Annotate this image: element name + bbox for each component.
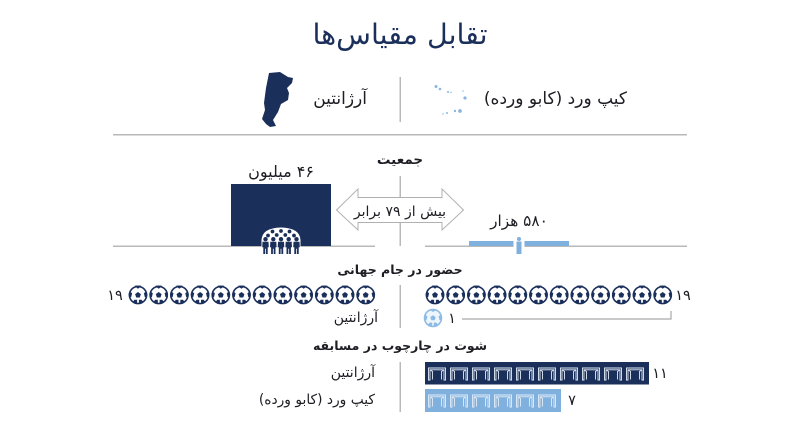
- icon: Cape Verde map: [434, 85, 467, 115]
- arrow: more than 79 times: [336, 189, 464, 230]
- panel: population: [113, 152, 687, 255]
- center divider: [400, 77, 401, 122]
- icon: person: [514, 236, 524, 254]
- heading: world cup appearances: حضور در جام جهانی: [337, 262, 463, 278]
- label: Cape Verde: کیپ ورد (کابو ورده): [259, 392, 375, 408]
- value: Cape Verde 19: ۱۹: [675, 288, 691, 304]
- icon row: Argentina balls: [129, 286, 375, 304]
- label: Argentina: آرژانتین: [313, 87, 368, 109]
- icon: Argentina map: [262, 72, 293, 127]
- icon: crowd: [262, 228, 300, 255]
- heading: population: جمعیت: [377, 152, 423, 168]
- bar: Argentina population: [231, 184, 331, 246]
- vertical axis: [400, 362, 401, 412]
- arrow: more than 79 times: بیش از ۷۹ برابر: [353, 204, 446, 220]
- value: Argentina 11: ۱۱: [652, 366, 668, 382]
- icon: light ball: [424, 309, 442, 327]
- heading: shots on target: شوت در چارچوب در مسابقه: [313, 338, 487, 353]
- value: Argentina 19: ۱۹: [107, 288, 123, 304]
- title: تقابل مقیاس‌ها: [312, 18, 488, 51]
- vertical axis: [400, 285, 401, 328]
- vertical axis: [400, 176, 401, 246]
- icon row: Cape Verde balls: [426, 286, 672, 304]
- bar: Cape Verde population: [469, 241, 569, 246]
- label: Argentina: آرژانتین: [331, 364, 376, 381]
- baseline right: [425, 246, 687, 247]
- value: Cape Verde 7: ۷: [568, 393, 576, 409]
- baseline left: [113, 246, 375, 247]
- panel: country header: [262, 72, 628, 127]
- value: 580 thousand: ۵۸۰ هزار: [489, 212, 548, 230]
- bar: Cape Verde shots: [425, 389, 561, 412]
- value: 46 million: ۴۶ میلیون: [248, 162, 314, 182]
- panel: shots on target: [259, 338, 668, 412]
- label: Cape Verde: کیپ ورد (کابو ورده): [484, 89, 628, 109]
- label: Argentina: آرژانتین: [334, 309, 379, 326]
- panel: world cup appearances: [107, 262, 691, 328]
- bar: Argentina shots: [425, 362, 649, 384]
- leader line: [462, 311, 671, 319]
- value: Cape Verde 1: ۱: [448, 311, 456, 327]
